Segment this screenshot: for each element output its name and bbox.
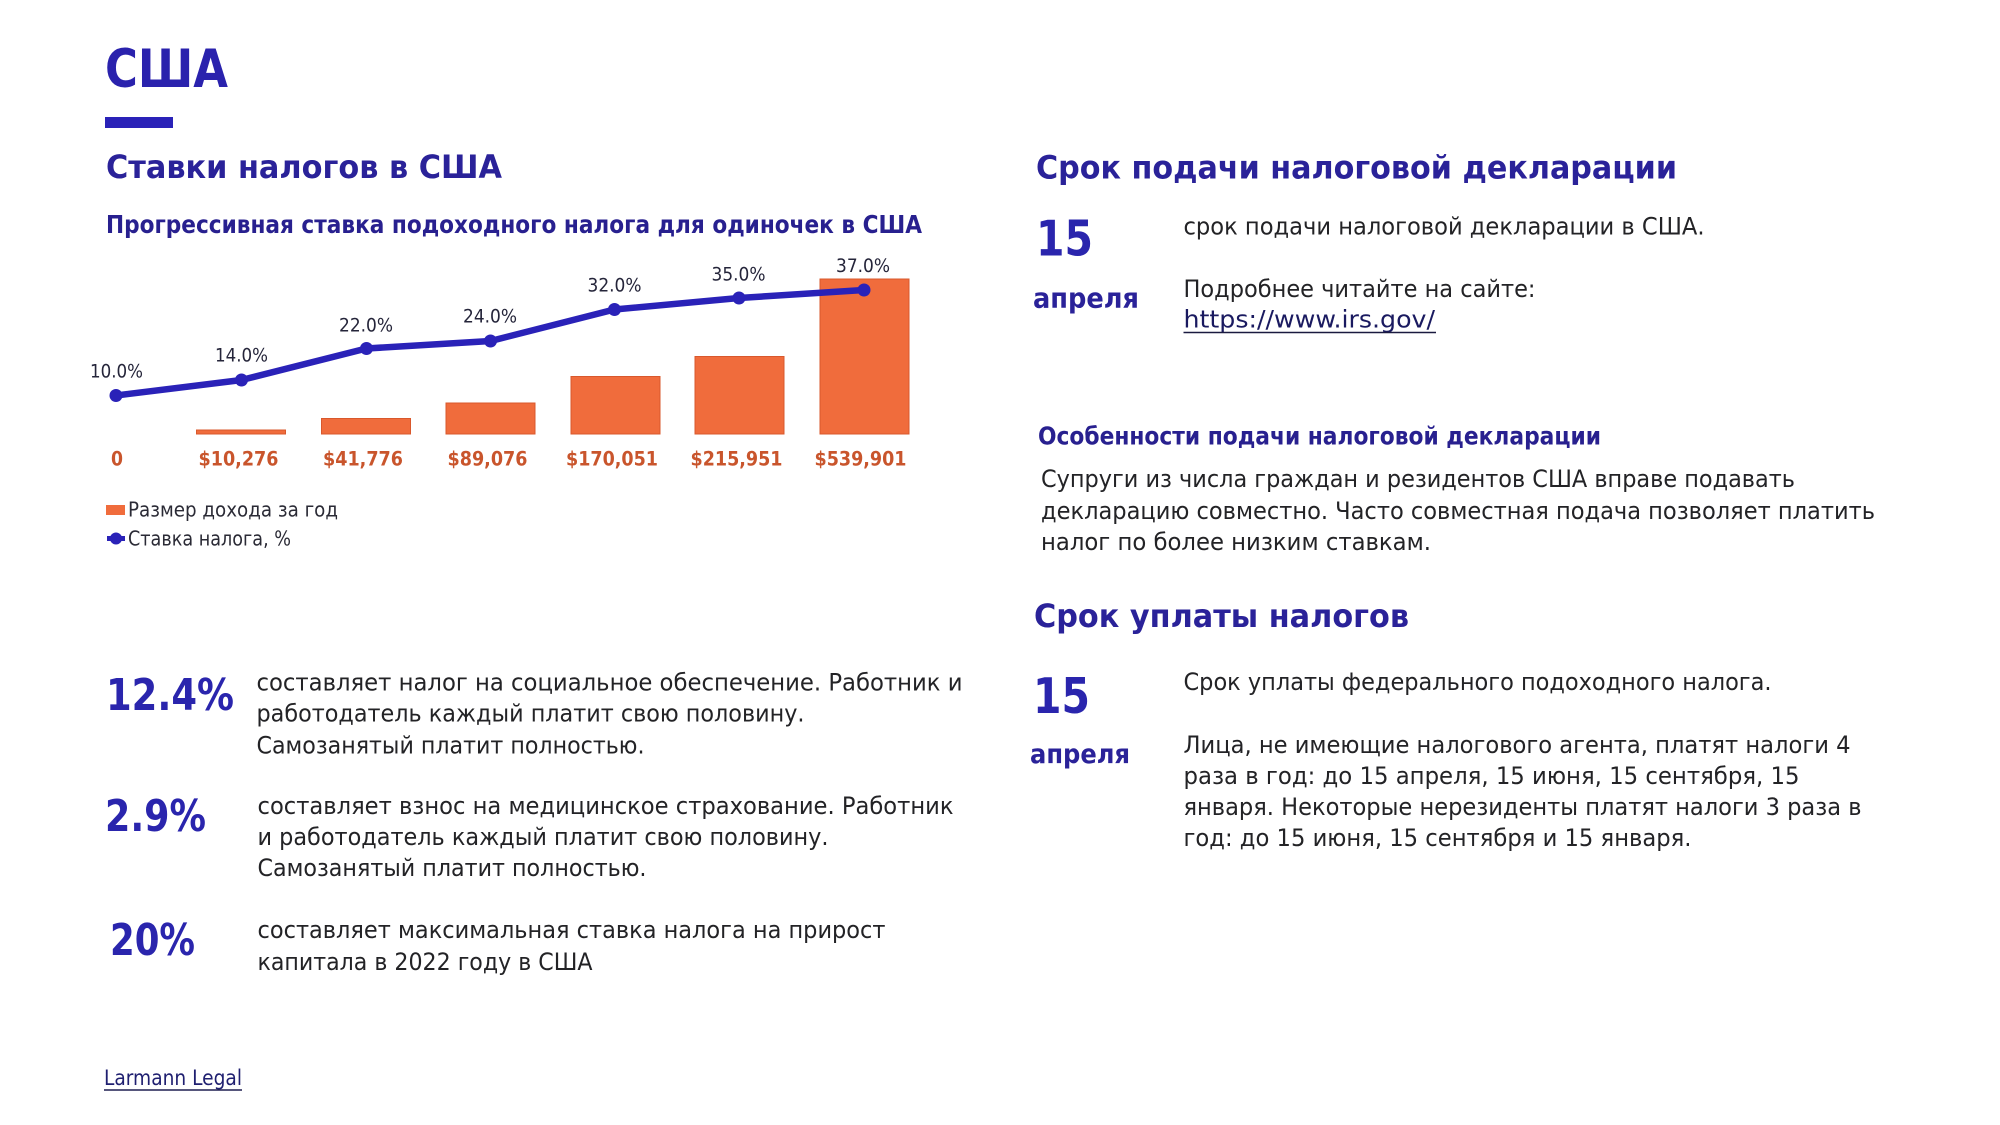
subheading: filing specifics: Особенности подачи налоговой декларации: [1038, 422, 1601, 450]
heading: filing deadline: Срок подачи налоговой декларации: [1036, 148, 1677, 186]
stat: 20%: составляет максимальная ставка налога на прирост: [258, 916, 886, 944]
stat: 12.4%: работодатель каждый платит свою половину.: [256, 700, 804, 728]
income axis labels: $41,776: [323, 448, 403, 470]
income axis labels: $539,901: [814, 448, 906, 470]
heading: payment deadline: Срок уплаты налогов: [1034, 597, 1409, 635]
income axis labels: [111, 448, 906, 470]
income bars: [196, 279, 909, 434]
rate value labels: 10.0%: [90, 360, 143, 382]
panel: filing specifics: [1038, 422, 1875, 556]
legend: Ставка налога, %: [128, 526, 291, 550]
income axis labels: 0: [111, 448, 123, 470]
chart title: Прогрессивная ставка подоходного налога для одиночек в США: [106, 210, 922, 239]
stat: 20%: капитала в 2022 году в США: [258, 948, 593, 976]
date: 15 April: апреля: [1030, 739, 1130, 770]
panel: tax rates: [90, 148, 922, 550]
payment deadline text: Срок уплаты федерального подоходного налога.: [1184, 668, 1772, 696]
panel: payment deadline: [1030, 597, 1862, 852]
filing specifics text: декларацию совместно. Часто совместная подача позволяет платить: [1041, 497, 1875, 525]
stat: 2.9%: 2.9%: [105, 791, 206, 842]
stat: 12.4%: 12.4%: [106, 670, 234, 721]
stat: 20%: 20%: [110, 915, 195, 966]
filing deadline text: [1184, 212, 1704, 334]
rate value labels: 32.0%: [588, 274, 642, 296]
combo chart: income bars and tax rate line: [90, 255, 909, 550]
heading: tax rates: Ставки налогов в США: [106, 148, 503, 186]
income axis labels: $215,951: [690, 448, 782, 470]
payment deadline text: января. Некоторые нерезиденты платят налоги 3 раза в: [1184, 793, 1862, 821]
stat: 20%: [110, 915, 886, 976]
title accent bar: [105, 117, 173, 128]
filing deadline text: срок подачи налоговой декларации в США.: [1184, 212, 1704, 240]
filing deadline text: https://www.irs.gov/: [1184, 306, 1436, 334]
filing specifics text: налог по более низким ставкам.: [1041, 528, 1431, 556]
tax rate line: [110, 284, 870, 402]
payment deadline text: [1184, 668, 1862, 852]
income axis labels: $170,051: [566, 448, 658, 470]
date: 15 April: [1033, 210, 1139, 314]
payment deadline text: Лица, не имеющие налогового агента, платят налоги 4: [1184, 731, 1850, 759]
filing specifics text: [1041, 465, 1875, 556]
stat: 2.9%: Самозанятый платит полностью.: [258, 854, 646, 882]
stat: 12.4%: Самозанятый платит полностью.: [256, 732, 644, 760]
rate value labels: 14.0%: [215, 344, 268, 366]
filing deadline text: Подробнее читайте на сайте:: [1184, 275, 1536, 303]
legend: [106, 498, 338, 550]
stat: 12.4%: [106, 668, 963, 760]
stat: 12.4%: составляет налог на социальное обеспечение. Работник и: [256, 668, 963, 696]
date: 15 April: 15: [1033, 668, 1090, 725]
rate value labels: 22.0%: [339, 314, 393, 336]
stat: 2.9%: и работодатель каждый платит свою половину.: [258, 823, 828, 851]
payment deadline text: раза в год: до 15 апреля, 15 июня, 15 сентября, 15: [1184, 762, 1800, 790]
footer source link: Larmann Legal: [104, 1066, 242, 1090]
rate value labels: 24.0%: [463, 306, 517, 328]
legend: Размер дохода за год: [128, 498, 338, 522]
date: 15 April: апреля: [1033, 282, 1139, 314]
rate value labels: 35.0%: [712, 264, 766, 286]
title: США: [105, 39, 228, 100]
payment deadline text: год: до 15 июня, 15 сентября и 15 января.: [1184, 824, 1692, 852]
panel: filing deadline: [1033, 148, 1704, 334]
rate value labels: [90, 255, 890, 382]
stat: 2.9%: [105, 791, 954, 882]
income axis labels: $89,076: [448, 448, 528, 470]
date: 15 April: [1030, 668, 1130, 770]
filing specifics text: Супруги из числа граждан и резидентов США вправе подавать: [1041, 465, 1795, 493]
stat: 2.9%: составляет взнос на медицинское страхование. Работник: [258, 792, 954, 820]
date: 15 April: 15: [1036, 210, 1093, 268]
income axis labels: $10,276: [198, 448, 278, 470]
rate value labels: 37.0%: [836, 255, 890, 277]
